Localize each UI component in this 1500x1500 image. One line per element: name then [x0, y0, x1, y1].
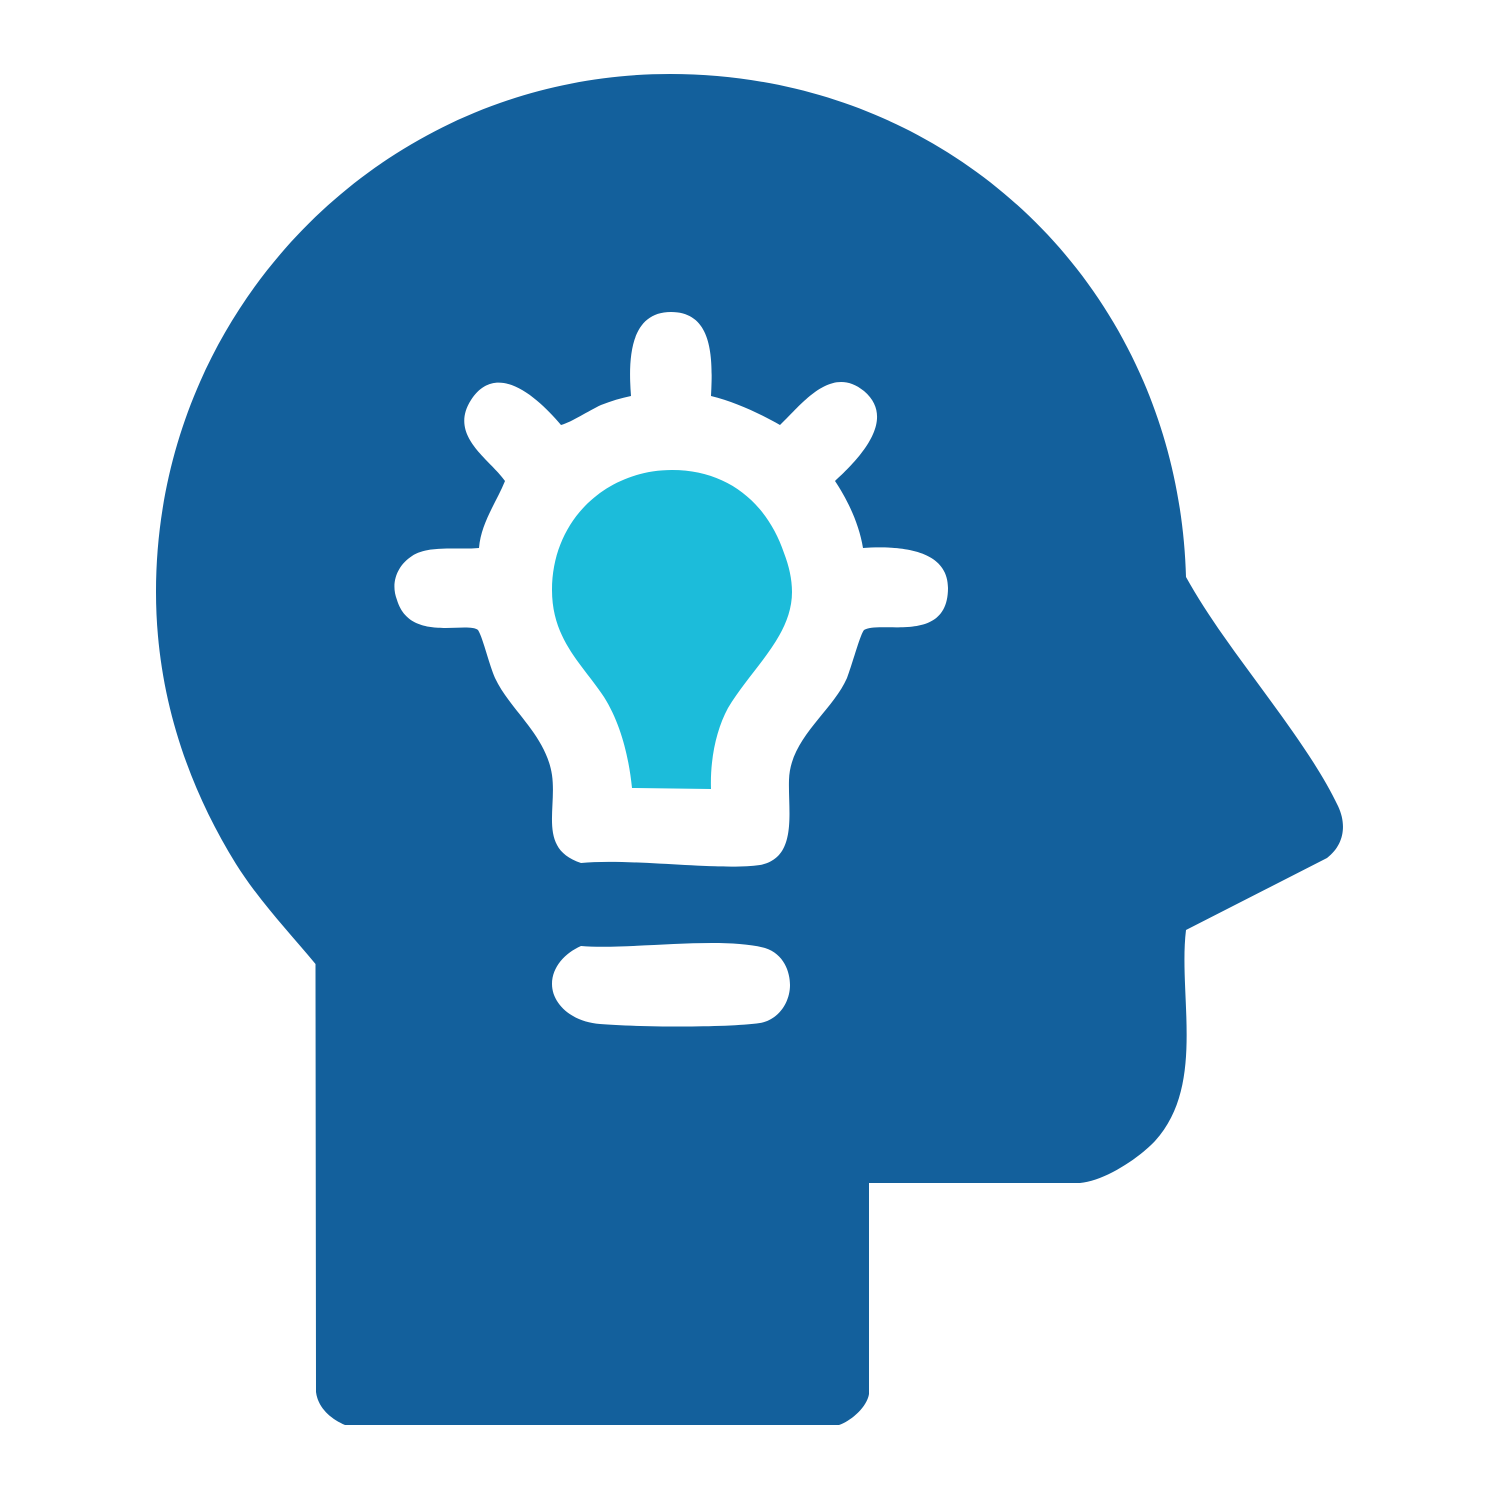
light bulb cyan glass	[552, 470, 792, 789]
head silhouette	[156, 74, 1343, 1425]
light bulb base bar	[552, 943, 790, 1026]
light bulb white outline with rays	[394, 312, 948, 867]
